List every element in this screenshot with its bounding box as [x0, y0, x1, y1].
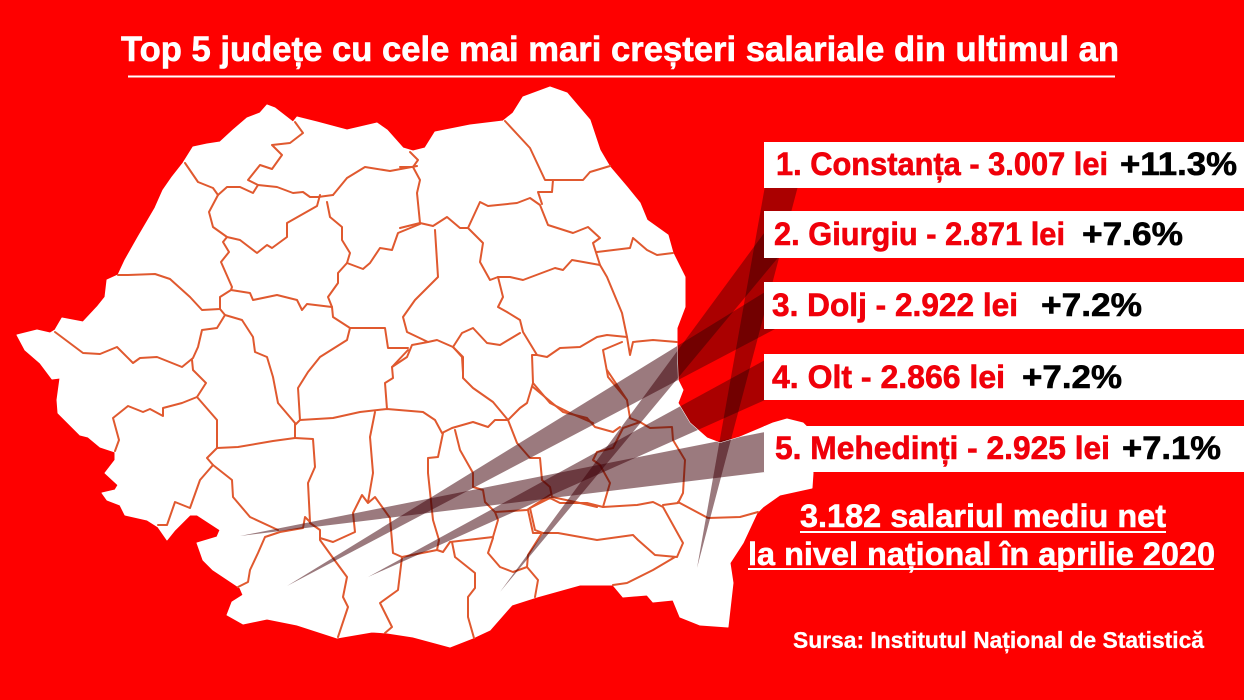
ranking row 2: 2. Giurgiu - 2.871 lei: [774, 216, 1065, 252]
county borders: [55, 121, 758, 638]
ranking row 1: +11.3%: [1120, 146, 1237, 182]
beam: Giurgiu: [500, 351, 678, 591]
beam: Mehedinți: [240, 432, 765, 536]
source note: Sursa: Institutul Național de Statistică: [793, 627, 1204, 654]
title: Top 5 județe cu cele mai mari creșteri salariale din ultimul an: [121, 30, 1119, 69]
map outline: [17, 87, 813, 647]
ranking row 3: [764, 282, 1244, 329]
leader beams over the red background: [240, 186, 801, 592]
beam: Dolj: [288, 346, 678, 586]
national average callout: la nivel național în aprilie 2020: [748, 536, 1215, 572]
ranking row 5: +7.1%: [1122, 430, 1221, 466]
ranking row 1: 1. Constanța - 3.007 lei: [776, 146, 1108, 182]
beam: Constanța: [697, 440, 731, 568]
ranking row 4: [764, 354, 1244, 400]
map of Romania with county borders: [17, 87, 813, 647]
beam: Olt: [368, 406, 698, 577]
ranking row 1: [764, 142, 1244, 188]
ranking row 2: [764, 211, 1244, 258]
ranking row 3: +7.2%: [1041, 287, 1142, 323]
ranking row 2: +7.6%: [1082, 216, 1183, 252]
ranking row 4: +7.2%: [1022, 359, 1122, 395]
ranking row 5: 5. Mehedinți - 2.925 lei: [775, 430, 1110, 466]
ranking row 5: [764, 426, 1244, 472]
national average callout: [748, 498, 1215, 572]
leader beams over the map: [240, 346, 764, 591]
ranking row 3: 3. Dolj - 2.922 lei: [772, 287, 1018, 323]
national average callout: 3.182 salariul mediu net: [800, 498, 1166, 534]
ranking row 4: 4. Olt - 2.866 lei: [772, 359, 1005, 395]
